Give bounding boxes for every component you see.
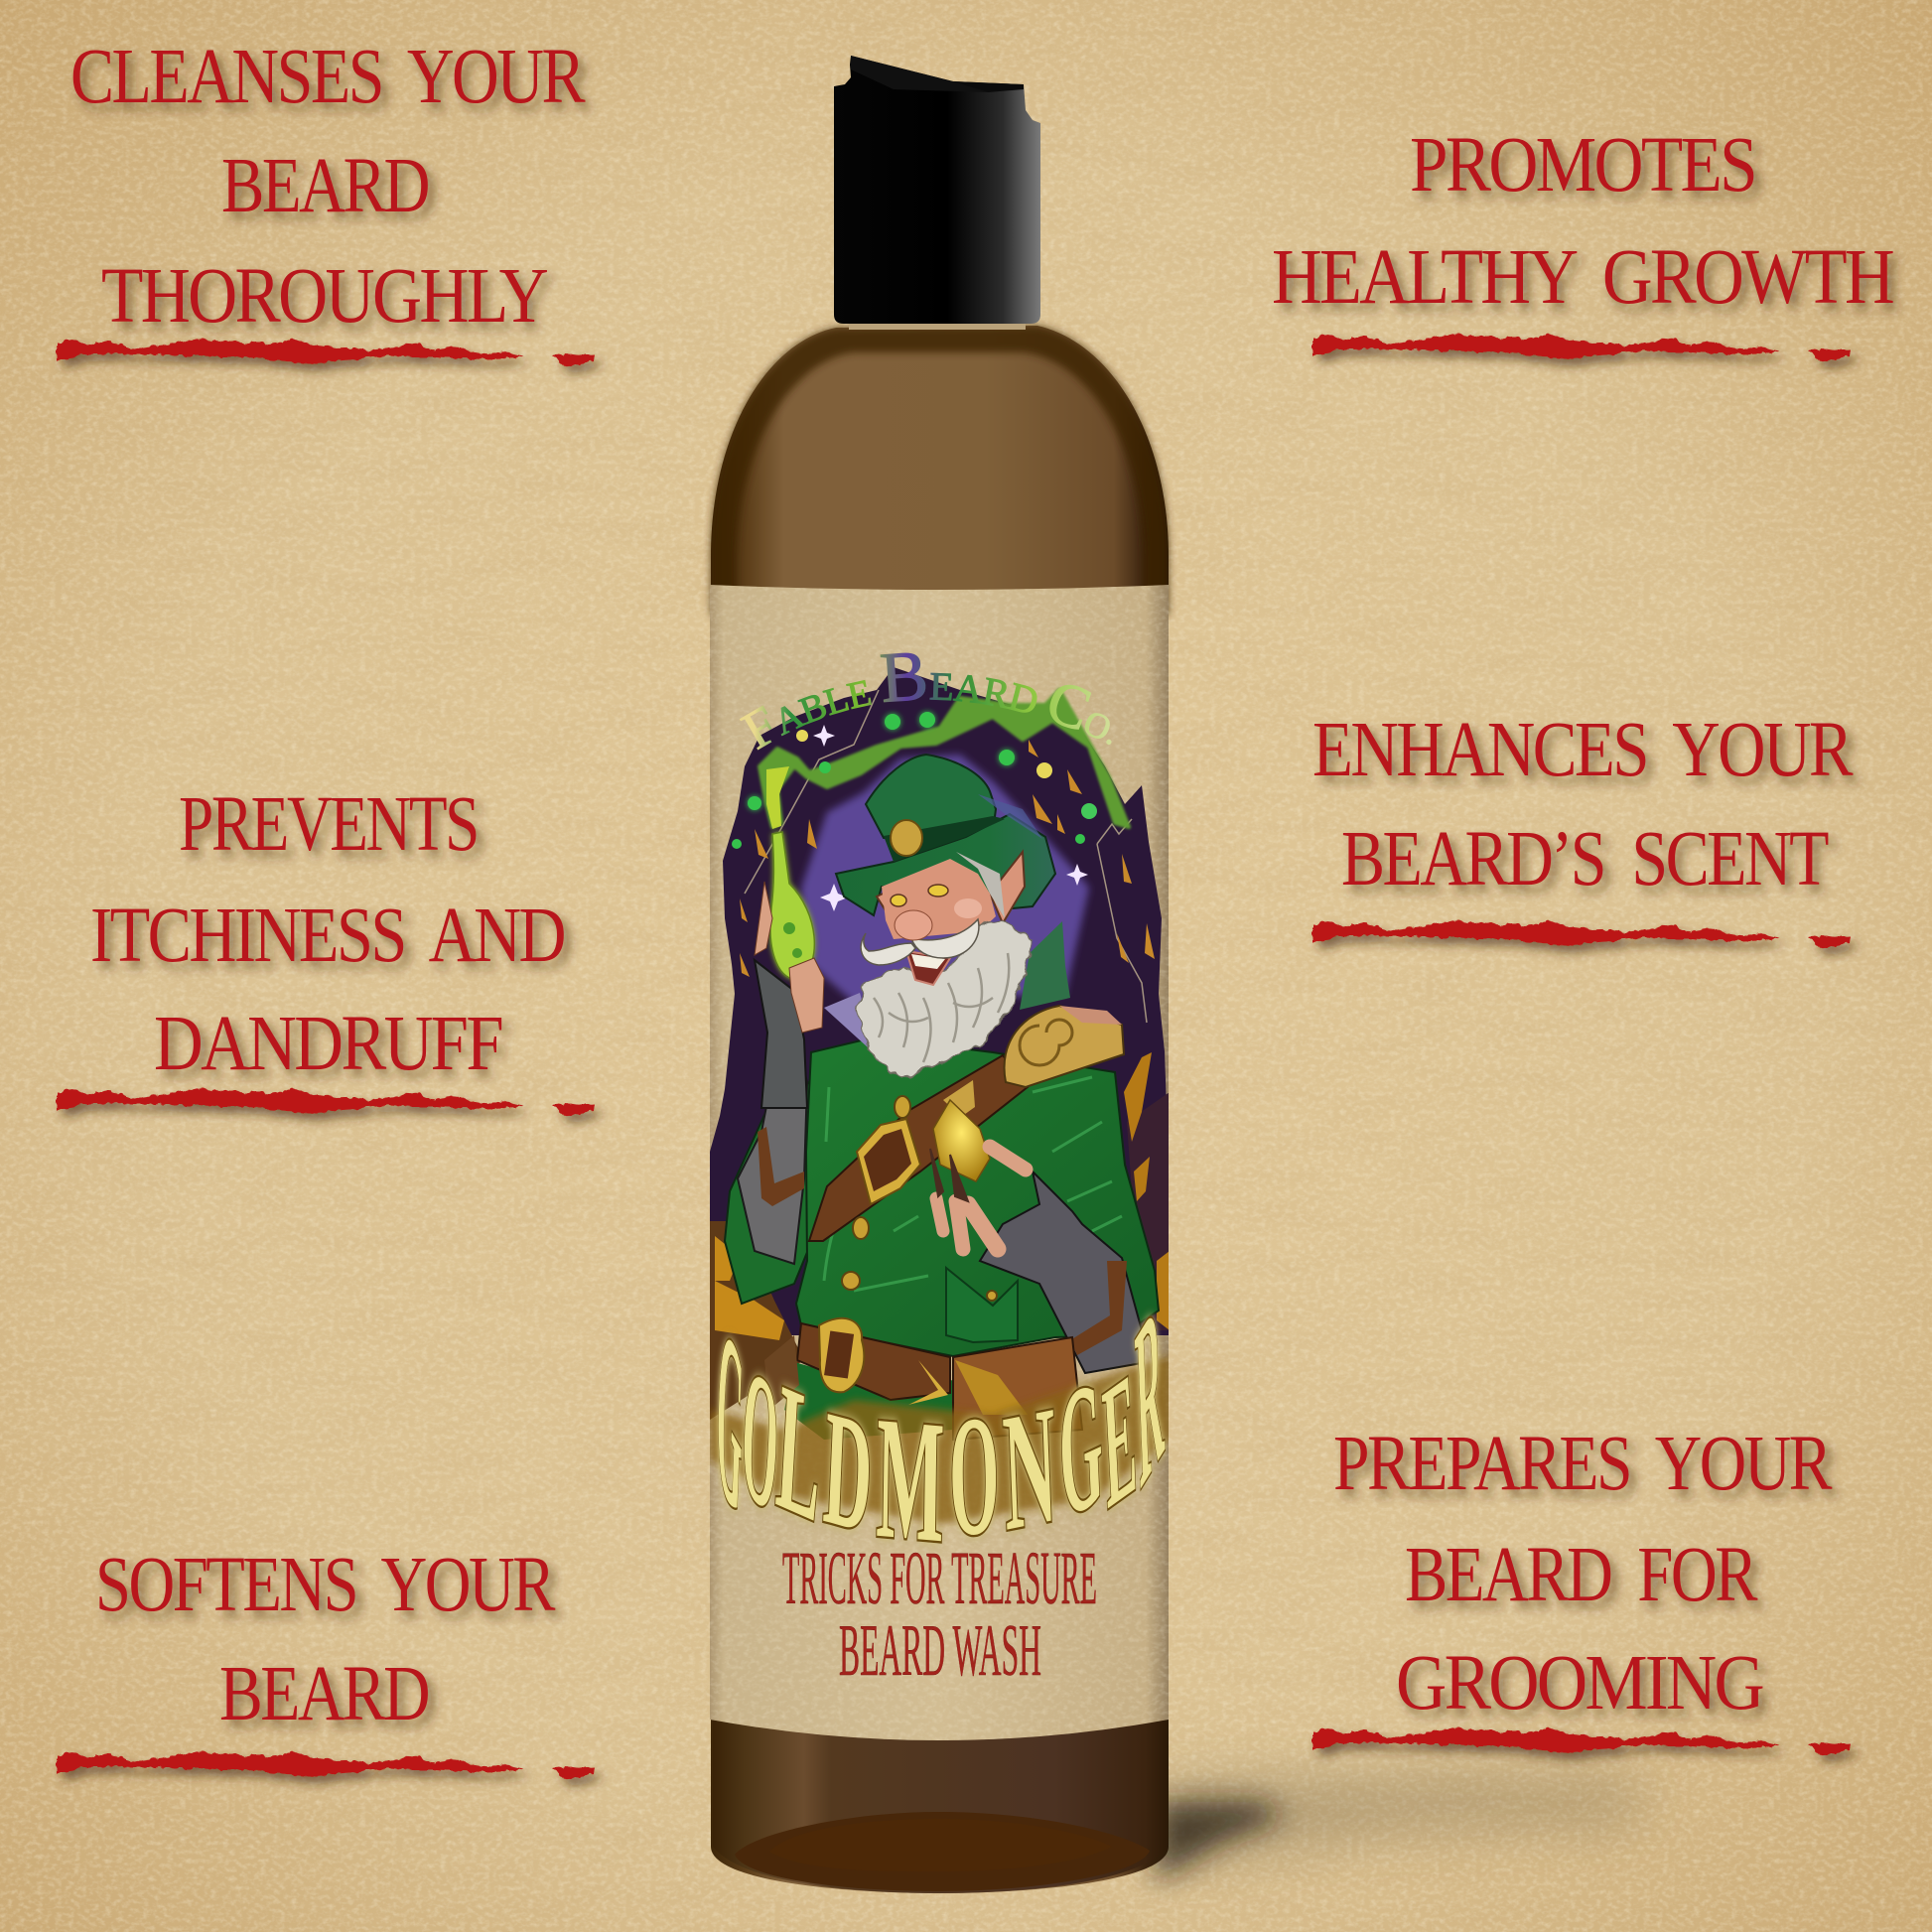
label artwork: moustache: [861, 919, 979, 965]
label title: GOLDMONGER: O: [735, 1322, 793, 1541]
text line: ENHANCES YOUR: [1312, 707, 1854, 793]
label artwork: coin piles: [710, 1052, 1170, 1420]
text line: PREVENTS: [179, 781, 478, 868]
bottle body: [711, 326, 1169, 1893]
label title: GOLDMONGER: L: [771, 1344, 831, 1556]
label artwork: strap keeper: [943, 1080, 975, 1117]
benefit: promotes healthy growth: [1272, 122, 1893, 361]
label artwork: left sleeve: [738, 1059, 807, 1264]
label artwork: hat: [836, 755, 1055, 915]
label artwork: potion flask: [770, 832, 814, 979]
label artwork: bandolier strap: [809, 1055, 1028, 1241]
label artwork: lower coat: [784, 1362, 953, 1440]
label artwork: coat folds: [824, 1077, 1122, 1291]
label artwork: eyes: [891, 885, 948, 906]
label artwork: green pouch: [764, 1335, 799, 1410]
benefit: prepares your beard for grooming: [1312, 1421, 1850, 1755]
text line: SOFTENS YOUR: [95, 1542, 556, 1628]
label artwork: strap buckle: [857, 1119, 920, 1204]
label title: GOLDMONGER: G: [708, 1268, 767, 1539]
label artwork: clovers and sparks: [732, 712, 1155, 977]
torn red underline: [57, 339, 594, 366]
infographic canvas: R: [1113, 1276, 1172, 1540]
benefit: enhances your beard's scent: [1312, 707, 1854, 948]
torn red underline: [1312, 1727, 1850, 1755]
label artwork: beard: [857, 920, 1033, 1079]
label title: GOLDMONGER: M: [875, 1379, 946, 1579]
label logo: Fable Beard Co.: FABLE BEARD CO.: [739, 653, 1112, 751]
label artwork: face: [882, 859, 996, 939]
label artwork: bedroll on shoulder: [1005, 1006, 1124, 1087]
text line: BEARD: [221, 143, 428, 229]
text line: DANDRUFF: [154, 1001, 502, 1087]
label artwork: satchel with coins: [953, 1337, 1082, 1440]
label artwork: title backing: [710, 1355, 1172, 1524]
label title: GOLDMONGER: D: [820, 1375, 878, 1566]
label artwork: cave cracks: [745, 690, 1147, 1023]
label artwork: slime drip: [766, 766, 789, 829]
benefit: softens your beard: [57, 1542, 594, 1779]
text line: BEARD: [219, 1651, 428, 1737]
label artwork: hand holding nugget: [930, 1147, 1026, 1249]
label artwork: right glove and sleeve: [980, 1172, 1142, 1373]
torn red underline: [57, 1751, 594, 1779]
infographic canvas: TRICKS FOR TREASURE: [782, 1537, 1097, 1620]
label artwork: green slime arc: [759, 690, 1129, 827]
label artwork: collar: [824, 921, 1070, 1057]
label artwork: waist belt: [797, 1318, 950, 1405]
label title: GOLDMONGER: G: [1050, 1347, 1108, 1558]
label artwork: ears: [877, 852, 1025, 923]
label artwork: nose: [895, 910, 932, 940]
label artwork: purple glow: [801, 755, 1089, 1003]
label title: GOLDMONGER: E: [1091, 1344, 1142, 1547]
torn red underline: [57, 1088, 594, 1116]
label artwork: chest pocket: [946, 1268, 1018, 1342]
label artwork: mouth: [906, 951, 950, 985]
text line: PROMOTES: [1410, 122, 1755, 208]
label artwork: hair: [956, 852, 1005, 918]
dispenser cap: [834, 56, 1040, 330]
label artwork: torso coat: [796, 1037, 1159, 1356]
label artwork: cave background: [710, 667, 1170, 1335]
panel: right benefits: [1272, 122, 1893, 1755]
text line: GROOMING: [1396, 1640, 1763, 1726]
text line: THOROUGHLY: [101, 253, 548, 340]
label artwork: left arm coat: [725, 1082, 824, 1304]
label: [710, 585, 1169, 1740]
label artwork: coat buttons: [842, 1096, 997, 1301]
label: BEARD WASH: [839, 1610, 1041, 1692]
label title: GOLDMONGER: [708, 1268, 1172, 1579]
label artwork: gold nugget: [933, 1100, 990, 1181]
bottle: [705, 56, 1174, 1893]
label artwork: left hand and glove: [755, 882, 824, 1108]
benefit: cleanses your beard thoroughly: [57, 34, 594, 366]
text line: PREPARES YOUR: [1333, 1421, 1833, 1507]
text line: CLEANSES YOUR: [70, 34, 586, 120]
torn red underline: [1312, 334, 1850, 361]
text line: ITCHINESS AND: [90, 893, 564, 979]
bottle cast shadow: [1157, 1777, 1648, 1881]
text line: BEARD FOR: [1405, 1532, 1758, 1618]
torn red underline: [1312, 920, 1850, 948]
benefit: prevents itchiness and dandruff: [57, 781, 594, 1116]
label title: GOLDMONGER: O: [947, 1379, 1001, 1573]
panel: left benefits: [57, 34, 594, 1779]
text line: BEARD’S SCENT: [1341, 816, 1828, 902]
label title: GOLDMONGER: N: [999, 1374, 1060, 1567]
